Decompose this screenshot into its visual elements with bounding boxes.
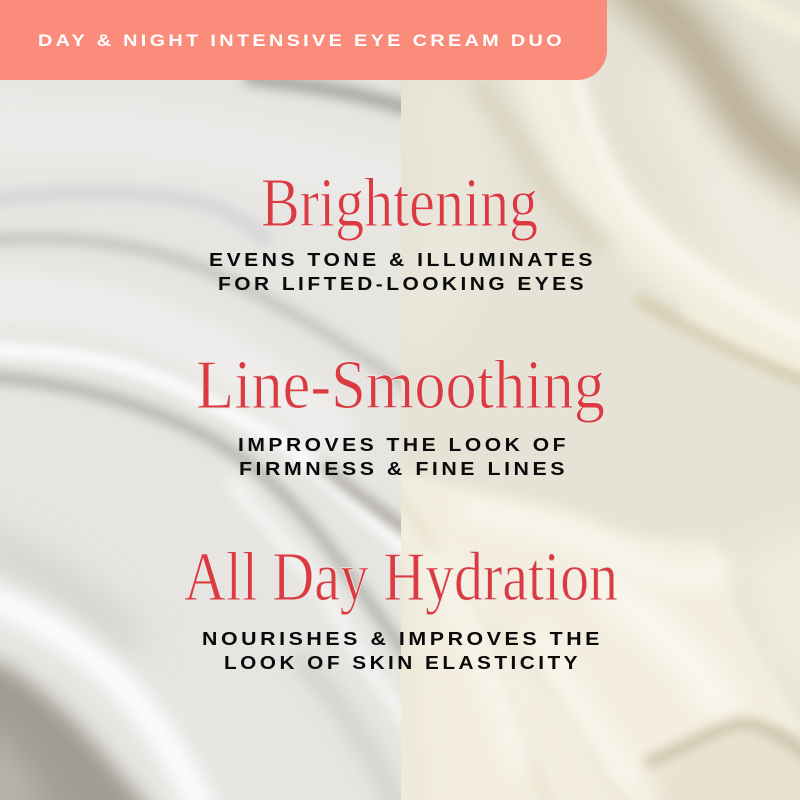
description: brightening <box>209 250 596 294</box>
description: all day hydration: LOOK OF SKIN ELASTICITY <box>224 653 581 673</box>
description: all day hydration <box>202 629 603 673</box>
heading: Brightening: Brightening <box>261 165 538 242</box>
heading: Line-Smoothing: Line-Smoothing <box>196 347 605 424</box>
benefit: line-smoothing <box>196 347 605 479</box>
banner <box>0 0 607 80</box>
background: white cream swatch <box>0 80 401 800</box>
description: brightening: FOR LIFTED-LOOKING EYES <box>218 274 587 294</box>
heading: All Day Hydration: All Day Hydration <box>184 539 618 616</box>
description: line-smoothing: IMPROVES THE LOOK OF <box>238 435 569 455</box>
description: all day hydration: NOURISHES & IMPROVES THE <box>202 629 603 649</box>
benefit: all day hydration <box>184 539 618 673</box>
banner text: DAY & NIGHT INTENSIVE EYE CREAM DUO <box>38 32 565 50</box>
background: yellow cream swatch <box>395 0 800 800</box>
description: line-smoothing: FIRMNESS & FINE LINES <box>239 459 568 479</box>
description: line-smoothing <box>238 435 569 479</box>
benefit: brightening <box>209 165 596 294</box>
description: brightening: EVENS TONE & ILLUMINATES <box>209 250 596 270</box>
